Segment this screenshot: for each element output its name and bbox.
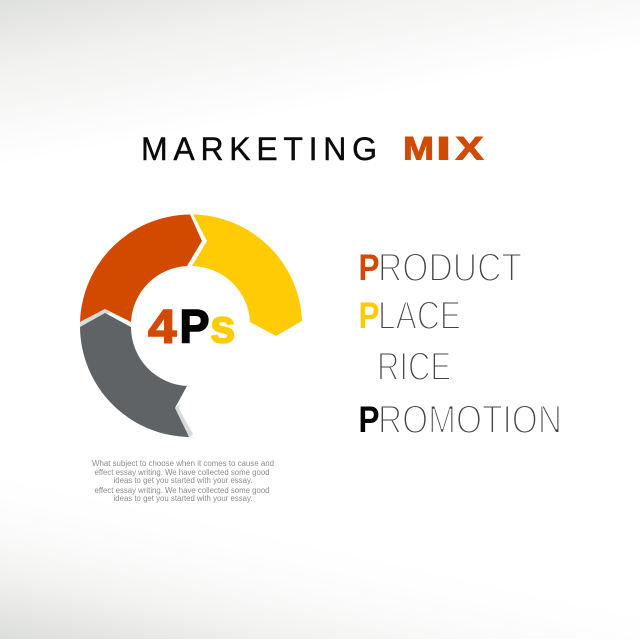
center label: 4Ps bbox=[148, 299, 236, 352]
title: I bbox=[436, 131, 451, 167]
list: the four Ps bbox=[358, 246, 562, 442]
donut chart: 4Ps bbox=[80, 214, 302, 437]
segment: promotion (gray) bbox=[80, 313, 189, 437]
text block: description: effect essay writing. We have collected some good bbox=[94, 468, 270, 477]
title: MARKETING bbox=[141, 131, 377, 167]
center label: 4Ps: s bbox=[210, 299, 236, 352]
segment shadow: promotion top edge bbox=[80, 309, 111, 328]
segment: place (yellow) bbox=[192, 214, 302, 336]
title: M bbox=[403, 131, 434, 167]
item: place: P bbox=[358, 295, 380, 336]
title: X bbox=[456, 131, 484, 167]
item: place bbox=[358, 294, 461, 338]
text block: description: effect essay writing. We have collected some good bbox=[94, 486, 270, 495]
text block: description: ideas to get you started with your essay. bbox=[114, 494, 252, 503]
item: place: LACE bbox=[378, 294, 461, 338]
center label: 4Ps: P bbox=[180, 299, 210, 352]
segment shadow: promotion arrow notch bbox=[174, 404, 193, 437]
title bbox=[141, 131, 484, 167]
center label: 4Ps: 4 bbox=[148, 299, 176, 352]
item: promotion: P bbox=[358, 399, 380, 440]
text block: description: ideas to get you started with your essay. bbox=[114, 476, 252, 485]
text block: description: What subject to choose when it comes to cause and bbox=[92, 459, 274, 468]
item: price: RICE bbox=[377, 345, 451, 389]
segment: product (orange) bbox=[80, 214, 202, 322]
item: product: RODUCT bbox=[378, 246, 522, 290]
item: product: P bbox=[358, 247, 380, 288]
text block: description bbox=[92, 459, 274, 503]
item: promotion: ROMOTION bbox=[378, 398, 562, 442]
